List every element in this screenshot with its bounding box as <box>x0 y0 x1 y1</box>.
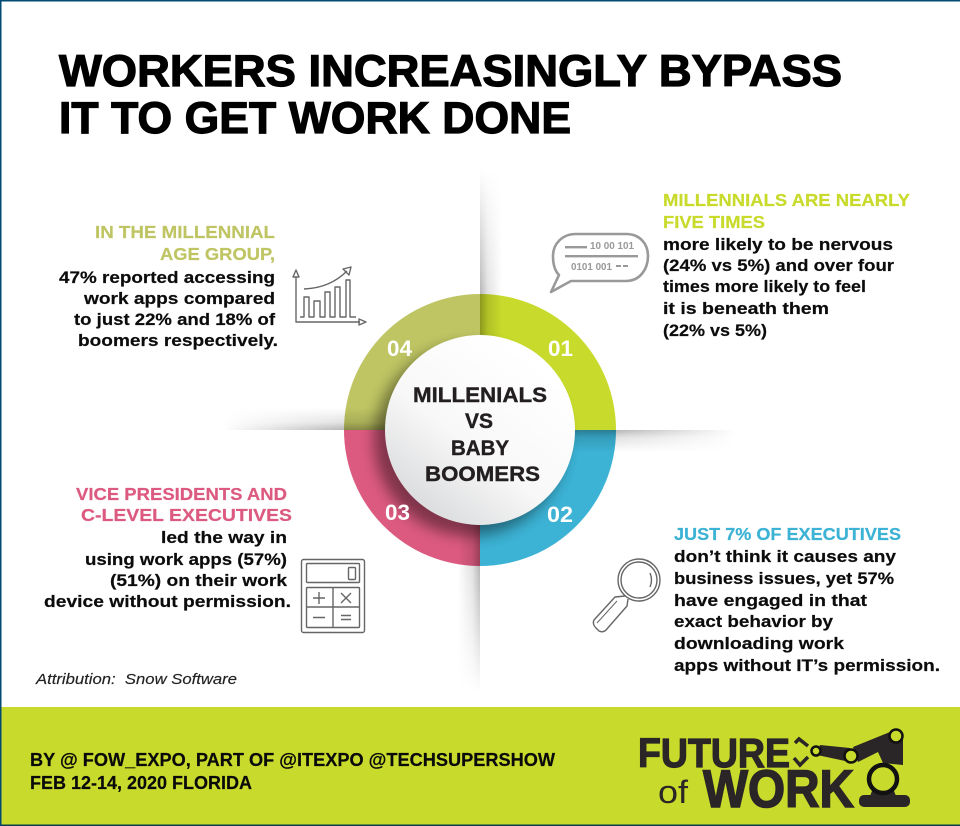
body 03: (51%) on their work <box>110 571 288 590</box>
body 01 <box>663 235 894 340</box>
heading 03 <box>76 484 292 525</box>
body 02: apps without IT’s permission. <box>674 656 940 675</box>
segment 02 <box>480 430 616 566</box>
panel: 03 executives <box>44 484 364 632</box>
body 01: times more likely to feel <box>663 277 866 296</box>
icon: speech bubble: 0101 001 <box>571 262 612 273</box>
heading 02: JUST 7% OF EXECUTIVES <box>674 524 901 544</box>
panel: 02 executives <box>593 524 940 675</box>
centre label: BOOMERS <box>425 462 540 486</box>
body 04: work apps compared <box>83 289 275 308</box>
footer text <box>30 750 555 793</box>
body 02: have engaged in that <box>674 591 867 610</box>
body 01: (24% vs 5%) and over four <box>663 256 894 275</box>
donut chart <box>340 290 620 570</box>
centre label: VS <box>465 409 493 433</box>
footer text: BY @ FOW_EXPO, PART OF @ITEXPO @TECHSUPERSHOW <box>30 750 555 770</box>
segment 04 <box>344 294 480 430</box>
logo: future of work <box>638 730 910 819</box>
body 03 <box>44 528 291 611</box>
attribution: Attribution: Snow Software <box>35 672 237 688</box>
body 04 <box>59 268 278 350</box>
centre disc <box>385 335 575 525</box>
centre label <box>413 383 547 486</box>
body 02: business issues, yet 57% <box>674 569 894 588</box>
body 01: more likely to be nervous <box>663 235 893 254</box>
body 03: using work apps (57%) <box>85 550 287 569</box>
body 03: device without permission. <box>44 592 291 611</box>
heading 03: C-LEVEL EXECUTIVES <box>81 505 292 525</box>
title <box>59 47 842 143</box>
logo: future of work: of <box>658 774 688 810</box>
segment numbers: 01 <box>548 336 573 361</box>
body 01: (22% vs 5%) <box>663 321 767 340</box>
icon: speech bubble: 10 00 101 <box>590 241 634 252</box>
heading 04: AGE GROUP, <box>160 244 275 264</box>
segment numbers: 03 <box>385 500 410 525</box>
fold shadows <box>222 170 735 692</box>
centre label: MILLENIALS <box>413 383 547 407</box>
segment numbers <box>385 336 573 527</box>
segment numbers: 02 <box>547 502 573 527</box>
heading 01: FIVE TIMES <box>663 212 765 232</box>
body 02: downloading work <box>674 634 845 653</box>
body 02: don’t think it causes any <box>674 547 897 566</box>
footer text: FEB 12-14, 2020 FLORIDA <box>30 773 252 793</box>
title: IT TO GET WORK DONE <box>59 94 571 143</box>
logo: future of work: FUTURE <box>638 730 790 776</box>
heading 03: VICE PRESIDENTS AND <box>76 484 287 504</box>
body 02 <box>674 547 940 675</box>
heading 01 <box>663 190 910 232</box>
icon: growth chart <box>293 267 366 325</box>
robot arm <box>794 730 910 807</box>
panel: 01 millennials nervous <box>551 190 910 340</box>
segment numbers: 04 <box>387 336 413 361</box>
body 04: 47% reported accessing <box>59 268 275 287</box>
body 04: to just 22% and 18% of <box>74 310 275 329</box>
body 01: it is beneath them <box>663 299 829 318</box>
heading 04 <box>95 222 275 264</box>
segment 03 <box>344 430 480 566</box>
title: WORKERS INCREASINGLY BYPASS <box>59 47 842 96</box>
body 02: exact behavior by <box>674 612 834 631</box>
footer band <box>0 707 960 826</box>
centre label: BABY <box>451 436 509 460</box>
logo: future of work: WORK <box>703 760 854 819</box>
icon: speech bubble <box>551 234 648 292</box>
body 03: led the way in <box>161 528 287 547</box>
heading 04: IN THE MILLENNIAL <box>95 222 275 242</box>
icon: magnifier <box>593 559 660 632</box>
icon: calculator <box>302 560 364 632</box>
panel: 04 millennial age group <box>59 222 366 350</box>
body 04: boomers respectively. <box>78 331 278 350</box>
ring shading <box>340 290 620 570</box>
heading 01: MILLENNIALS ARE NEARLY <box>663 190 910 210</box>
segment 01 <box>480 294 616 430</box>
